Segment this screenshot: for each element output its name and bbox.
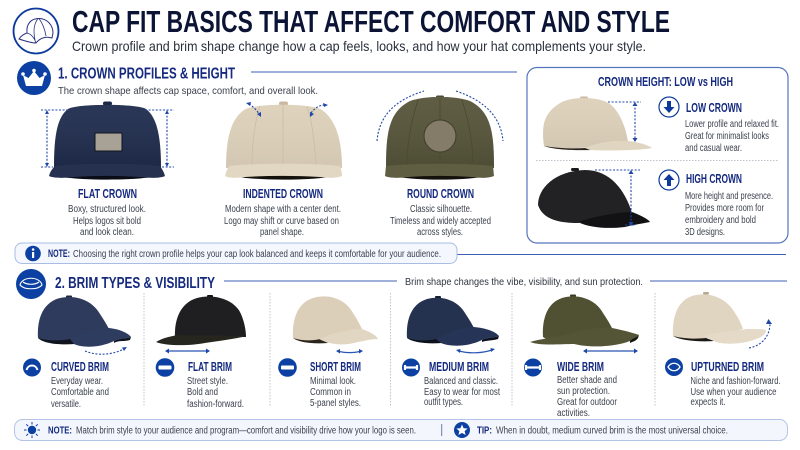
icon: flat brim xyxy=(156,358,174,377)
panel: upturned brim xyxy=(665,292,780,408)
medium brim text: Easy to wear for most xyxy=(424,387,500,398)
round crown text: across styles. xyxy=(417,227,463,238)
high crown text xyxy=(685,191,773,238)
section 2 rule left xyxy=(224,280,397,282)
curved brim text: Comfortable and xyxy=(51,387,109,398)
dent arrows xyxy=(246,102,328,117)
flat brim text: fashion-forward. xyxy=(187,399,244,410)
icon: upturned brim xyxy=(665,358,683,376)
icon: cap logo xyxy=(14,8,58,54)
upturned brim label: UPTURNED BRIM xyxy=(691,360,764,374)
short brim text: Minimal look. xyxy=(310,376,356,387)
icon: brim badge xyxy=(16,269,46,299)
wide brim text: activities. xyxy=(557,408,590,419)
panel: short brim xyxy=(278,296,378,409)
high crown marker xyxy=(595,170,640,226)
wide brim text xyxy=(557,375,618,419)
panel: crown height low vs high xyxy=(527,68,788,243)
section 2 rule right xyxy=(650,280,787,282)
panel: wide brim xyxy=(524,294,639,419)
flat cap image xyxy=(49,102,165,180)
wide brim text: sun protection. xyxy=(557,386,610,397)
round crown text: Timeless and widely accepted xyxy=(390,216,491,227)
icon: crown badge xyxy=(17,61,51,95)
note label: NOTE: xyxy=(48,424,72,436)
icon: high crown arrow xyxy=(659,170,679,190)
wide brim text: Great for outdoor xyxy=(557,397,618,408)
round cap image xyxy=(385,96,494,180)
tip label: TIP: xyxy=(477,424,492,436)
callout: crown note xyxy=(15,243,457,264)
callout: footer note and tip xyxy=(14,420,788,440)
indented crown text: Logo may shift or curve based on xyxy=(224,216,339,227)
low crown text: Great for minimalist looks xyxy=(685,131,769,142)
flat crown text: Helps logos sit bold xyxy=(73,216,141,227)
upturned brim text: expects it. xyxy=(690,397,726,408)
round crown text: Classic silhouette. xyxy=(410,204,472,215)
panel: round crown xyxy=(377,91,503,238)
indented crown text: Modern shape with a center dent. xyxy=(225,204,341,215)
round crown text xyxy=(390,204,491,238)
upturned brim text xyxy=(690,376,780,408)
icon: info xyxy=(25,246,41,261)
flat brim arrow xyxy=(165,348,210,354)
section 1 intro: The crown shape affects cap space, comfort, and overall look. xyxy=(58,85,318,97)
panel: flat brim xyxy=(156,295,246,410)
low crown text xyxy=(685,119,779,154)
medium brim text: Balanced and classic. xyxy=(424,376,498,387)
indented crown text: panel shape. xyxy=(260,227,304,238)
short brim text xyxy=(310,376,361,409)
icon: medium brim xyxy=(402,358,420,376)
flat brim label: FLAT BRIM xyxy=(188,360,232,374)
curved brim cap image xyxy=(38,296,131,347)
curved brim text xyxy=(51,376,109,410)
flat crown height markers xyxy=(41,110,174,167)
icon: wide brim xyxy=(524,358,542,376)
medium brim arrow xyxy=(456,348,495,353)
panel heading: CROWN HEIGHT: LOW vs HIGH xyxy=(598,75,733,89)
flat crown label: FLAT CROWN xyxy=(78,186,137,201)
upturned brim arrow xyxy=(749,319,772,348)
short brim text: Common in xyxy=(310,387,351,398)
upturned brim cap image xyxy=(673,292,766,344)
note text: Choosing the right crown profile helps your cap look balanced and keeps it comfortable for your audience. xyxy=(73,249,441,260)
high crown label: HIGH CROWN xyxy=(686,172,742,186)
icon: low crown arrow xyxy=(659,97,679,117)
medium brim label: MEDIUM BRIM xyxy=(429,360,489,374)
medium brim cap image xyxy=(407,296,499,346)
flat brim cap image xyxy=(156,295,246,345)
curved brim label: CURVED BRIM xyxy=(51,360,109,374)
tip text: When in doubt, medium curved brim is the most universal choice. xyxy=(496,426,728,436)
curved brim arrow xyxy=(85,347,127,354)
icon: star xyxy=(454,422,470,438)
high crown text: embroidery and bold xyxy=(685,215,756,226)
round crown arc xyxy=(377,91,503,141)
curved brim text: versatile. xyxy=(51,399,81,410)
icon: sun xyxy=(24,422,40,438)
icon: curved brim xyxy=(23,358,41,376)
note text: Match brim style to your audience and program—comfort and visibility drive how your logo is seen. xyxy=(76,426,416,436)
short brim text: 5-panel styles. xyxy=(310,398,361,409)
high crown text: Provides more room for xyxy=(685,203,765,214)
flat crown text: and look clean. xyxy=(80,227,134,238)
flat brim text xyxy=(187,376,244,410)
round crown label: ROUND CROWN xyxy=(407,186,474,201)
wide brim arrow xyxy=(583,348,638,354)
wide brim text: Better shade and xyxy=(557,375,617,386)
panel: indented crown xyxy=(224,102,342,238)
indented crown label: INDENTED CROWN xyxy=(243,186,323,201)
short brim label: SHORT BRIM xyxy=(310,360,361,374)
wide brim label: WIDE BRIM xyxy=(557,360,604,374)
upturned brim text: Use when your audience xyxy=(690,387,777,398)
short brim cap image xyxy=(293,296,378,344)
low crown text: and casual wear. xyxy=(685,143,742,154)
note rule xyxy=(457,254,786,256)
panel: flat crown xyxy=(41,102,174,238)
wide brim cap image xyxy=(530,294,639,346)
high crown text: 3D designs. xyxy=(685,227,725,238)
flat crown text xyxy=(68,204,146,238)
heading: brim types: 2. BRIM TYPES & VISIBILITY xyxy=(55,275,215,292)
section 2 intro: Brim shape changes the vibe, visibility, and sun protection. xyxy=(405,276,643,288)
panel: curved brim xyxy=(23,296,131,410)
panel: medium brim xyxy=(402,296,500,408)
subtitle: Crown profile and brim shape change how a cap feels, looks, and how your hat complements your style. xyxy=(72,38,646,54)
low crown cap image xyxy=(543,96,652,150)
section 1 rule xyxy=(251,71,517,73)
low crown label: LOW CROWN xyxy=(686,101,742,115)
curved brim text: Everyday wear. xyxy=(51,376,103,387)
short brim arrow xyxy=(336,349,363,354)
flat brim text: Street style. xyxy=(187,376,228,387)
note label: NOTE: xyxy=(48,248,70,260)
medium brim text: outfit types. xyxy=(424,397,463,408)
indented cap image xyxy=(225,102,342,180)
indented crown text xyxy=(224,204,341,238)
flat crown text: Boxy, structured look. xyxy=(68,204,146,215)
icon: short brim xyxy=(278,358,297,377)
low crown marker xyxy=(608,102,641,142)
medium brim text xyxy=(424,376,500,408)
heading: crown profiles: 1. CROWN PROFILES & HEIGHT xyxy=(58,66,235,82)
flat brim text: Bold and xyxy=(187,387,218,398)
high crown cap image xyxy=(538,168,650,228)
